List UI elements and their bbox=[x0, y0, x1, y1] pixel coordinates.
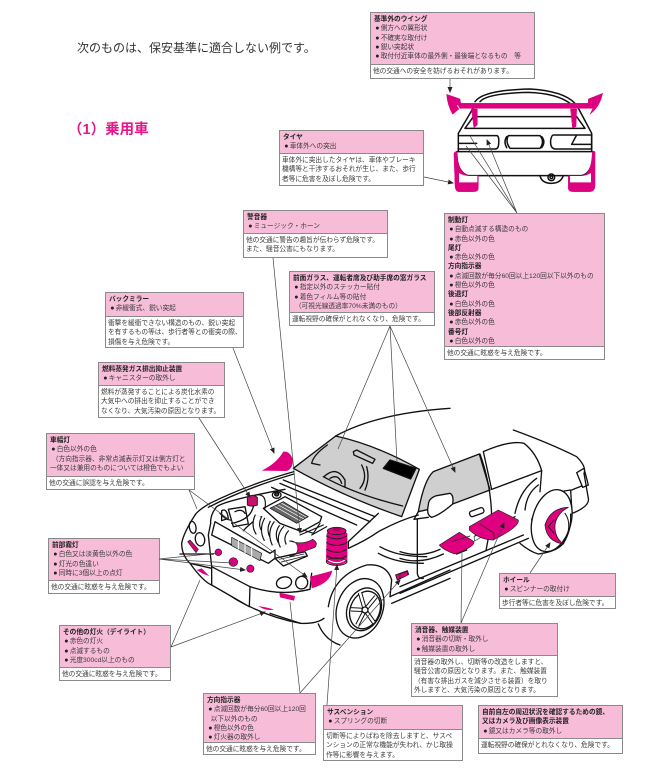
box: fog lamps: 他の交通に眩惑を与え危険です。 bbox=[51, 584, 151, 591]
box: rear lights: 方向指示器 bbox=[448, 263, 481, 270]
box: fuel evaporation: 燃料蒸発ガス排出抑止装置 bbox=[102, 366, 182, 373]
arrow: tire bbox=[424, 177, 453, 183]
box: rear lights: 赤色以外の色 bbox=[455, 319, 495, 326]
box: muffler and catalyst: 消音器の取外し、切断等の改造をしますと、 bbox=[414, 659, 547, 666]
box: wing: 不確実な取付け bbox=[381, 35, 428, 42]
box: horn: 他の交通に警告の趣旨が伝わらず危険です。 bbox=[246, 237, 379, 244]
box: rear lights: ● bbox=[449, 282, 453, 289]
box: muffler and catalyst: 触媒装置の取外し bbox=[422, 646, 475, 653]
front wheel bbox=[318, 565, 393, 645]
box: rear lights: 他の交通に眩惑を与え危険です。 bbox=[447, 350, 547, 357]
box: rear-view mirror: を有するもの等は、歩行者等との衝突の際、 bbox=[108, 329, 242, 336]
box: direct view mirrors: 鏡又はカメラ等の取外し bbox=[489, 728, 562, 735]
box: suspension: サスペンション bbox=[327, 709, 373, 716]
arrows: other lights bbox=[171, 580, 265, 647]
box: direct view mirrors: 又はカメラ及び画像表示装置 bbox=[482, 718, 569, 725]
box: windshield: 指定以外のステッカー貼付 bbox=[300, 284, 380, 291]
icon: suspension spring bbox=[326, 527, 347, 565]
box: rear lights: 赤色以外の色 bbox=[455, 254, 495, 261]
box: rear lights bbox=[444, 213, 605, 360]
box: wing: ● bbox=[375, 53, 379, 60]
box: horn: ● bbox=[248, 223, 252, 230]
rear wheel bbox=[525, 485, 579, 556]
box: muffler and catalyst: （有害な排出ガスを減少させる装置）を取り bbox=[414, 678, 548, 685]
box: rear lights: 橙色以外の色 bbox=[455, 282, 495, 289]
box: other lights: 他の交通に眩惑を与え危険です。 bbox=[62, 671, 162, 678]
box: horn: また、騒音公害にもなります。 bbox=[246, 246, 339, 253]
arrow: horn bbox=[273, 258, 300, 533]
box: other lights: 光度300cd以上のもの bbox=[70, 657, 135, 664]
box: horn: ミュージック・ホーン bbox=[254, 223, 320, 230]
box: other lights: ● bbox=[64, 657, 68, 664]
box: wheel: ホイール bbox=[503, 577, 530, 584]
box: tire: 者等に危害を及ぼし危険です。 bbox=[282, 176, 375, 183]
box: rear lights: 後部反射器 bbox=[448, 310, 481, 317]
icon: canister bbox=[247, 495, 257, 506]
arrows: fog lamps bbox=[159, 553, 245, 570]
box: other lights: 点滅するもの bbox=[70, 648, 110, 655]
box: other lights: 赤色の灯火 bbox=[70, 638, 103, 645]
box: rear lights: 点滅回数が毎分60回以上120回以下以外のもの bbox=[455, 273, 594, 280]
box: suspension: スプリングの切断 bbox=[334, 718, 387, 725]
arrow: suspension bbox=[327, 565, 337, 705]
box: muffler and catalyst: 消音器、触媒装置 bbox=[415, 627, 468, 634]
box: rear lights: 尾灯 bbox=[448, 245, 461, 252]
box: fog lamps: 同時に3個以上の点灯 bbox=[59, 570, 123, 577]
icon: mudflaps bbox=[454, 152, 595, 192]
box: other lights: ● bbox=[64, 638, 68, 645]
box: wing: 基準外のウイング bbox=[374, 16, 428, 23]
box: side lamp: 車幅灯 bbox=[50, 437, 70, 444]
box: wheel: スピンナーの取付け bbox=[510, 586, 570, 593]
box: fuel evaporation: なくなり、大気汚染の原因となります。 bbox=[101, 408, 220, 415]
box: fuel evaporation bbox=[98, 362, 225, 418]
box: horn: 警音器 bbox=[247, 214, 267, 221]
arrows: muffler bbox=[461, 523, 504, 623]
box: wing: 鋭い突起状 bbox=[381, 44, 414, 51]
box: side lamp: （方向指示器、非常点滅表示灯又は側方灯と bbox=[52, 456, 186, 463]
box: muffler and catalyst: ● bbox=[416, 636, 420, 643]
arrows: side lamp bbox=[189, 490, 307, 577]
box: suspension bbox=[323, 705, 463, 761]
heading: passenger cars: （1）乗用車 bbox=[68, 122, 149, 138]
box: windshield bbox=[289, 271, 435, 326]
box: direct view mirrors bbox=[478, 705, 623, 754]
arrows: turn signal bbox=[290, 580, 400, 693]
box: muffler and catalyst: 消音器の切断・取外し bbox=[422, 636, 489, 643]
rear view car bbox=[447, 89, 603, 192]
box: windshield: 前面ガラス、運転者席及び助手席の窓ガラス bbox=[293, 275, 426, 282]
box: fuel evaporation: 大気中への排出を抑止することができ bbox=[101, 398, 215, 405]
box: wing: ● bbox=[375, 35, 379, 42]
box: rear lights: 後退灯 bbox=[448, 291, 468, 298]
box: wing: ● bbox=[375, 44, 379, 51]
box: muffler and catalyst bbox=[411, 623, 558, 697]
box: tire: 車体外に突出したタイヤは、車体やブレーキ bbox=[282, 157, 416, 164]
icon: wing bbox=[447, 93, 603, 128]
box: other lights bbox=[59, 625, 171, 681]
box: horn bbox=[243, 210, 388, 258]
icons: pink lamps bbox=[188, 452, 409, 610]
box: suspension: ● bbox=[328, 718, 332, 725]
box: rear lights: ● bbox=[449, 254, 453, 261]
box: muffler and catalyst: 騒音公害の原因となります。また、触媒装置 bbox=[414, 668, 547, 675]
box: side lamp: 一体又は兼用のものについては橙色でもよい bbox=[50, 465, 183, 472]
box: turn signals: 以下以外のもの bbox=[211, 716, 258, 723]
box: turn signals: 方向指示器 bbox=[207, 697, 240, 704]
box: wing: 他の交通への安全を妨げるおそれがあります。 bbox=[373, 68, 513, 75]
box: fuel evaporation: キャニスターの取外し bbox=[109, 375, 176, 382]
box: direct view mirrors: ● bbox=[483, 728, 487, 735]
box: turn signals: 点滅回数が毎分60回以上120回 bbox=[214, 706, 306, 713]
box: turn signals: 灯火器の取外し bbox=[214, 734, 260, 741]
arrow: canister bbox=[199, 418, 250, 497]
box: turn signals: ● bbox=[208, 725, 212, 732]
box: muffler and catalyst: ● bbox=[416, 646, 420, 653]
box: turn signals bbox=[203, 693, 316, 755]
box: rear lights: 制動灯 bbox=[448, 217, 468, 224]
arrow: mirror bbox=[233, 348, 274, 453]
title: 次のものは、保安基準に適合しない例です。 bbox=[77, 41, 316, 55]
arrows: rear lights bbox=[466, 136, 517, 213]
box: turn signals: ● bbox=[208, 706, 212, 713]
rear and side of car bbox=[400, 430, 588, 593]
box: tire: 機構等と干渉するおそれが生じ、また、歩行 bbox=[282, 166, 416, 173]
box: rear lights: ● bbox=[449, 301, 453, 308]
box: rear-view mirror: バックミラー bbox=[109, 296, 149, 303]
box: side lamp: 白色以外の色 bbox=[57, 446, 97, 453]
box: side lamp: 他の交通に誤認を与え危険です。 bbox=[49, 480, 149, 487]
box: fog lamps: 灯光の色違い bbox=[59, 561, 99, 568]
box: fog lamps: ● bbox=[53, 561, 57, 568]
arrow: wheel bbox=[530, 543, 550, 573]
box: muffler and catalyst: 外しますと、大気汚染の原因となります。 bbox=[414, 687, 540, 694]
box: direct view mirrors: 運転視野の確保がとれなくなり、危険です。 bbox=[481, 742, 614, 749]
box: windshield: 運転視野の確保がとれなくなり、危険です。 bbox=[292, 316, 425, 323]
box: windshield: ● bbox=[294, 284, 298, 291]
box: rear lights: ● bbox=[449, 273, 453, 280]
box: rear lights: 白色以外の色 bbox=[455, 338, 495, 345]
box: turn signals: 橙色以外の色 bbox=[214, 725, 254, 732]
box: rear lights: ● bbox=[449, 319, 453, 326]
box: other lights: その他の灯火（デイライト） bbox=[63, 629, 150, 636]
arrows: windshield bbox=[338, 326, 455, 472]
box: rear lights: ● bbox=[449, 338, 453, 345]
box: fuel evaporation: ● bbox=[103, 375, 107, 382]
box: tire bbox=[279, 130, 424, 186]
box: rear-view mirror: ● bbox=[110, 305, 114, 312]
box: turn signals: ● bbox=[208, 734, 212, 741]
box: fog lamps: ● bbox=[53, 551, 57, 558]
box: wheel: 歩行者等に危害を及ぼし危険です。 bbox=[502, 600, 608, 607]
box: wheel bbox=[499, 573, 616, 609]
box: wing: ● bbox=[375, 25, 379, 32]
box: side lamp: ● bbox=[51, 446, 55, 453]
engine bbox=[212, 492, 327, 566]
box: turn signals: 他の交通に眩惑を与え危険です。 bbox=[206, 746, 306, 753]
box: rear-view mirror: 非緩衝式、鋭い突起 bbox=[116, 305, 176, 312]
box: fog lamps bbox=[48, 538, 160, 594]
box: windshield: （可視光線透過率70%未満のもの） bbox=[295, 303, 402, 310]
box: suspension: ンションの正常な機能が失われ、かじ取操 bbox=[326, 742, 453, 749]
box: rear-view mirror: 衝撃を緩衝できない構造のもの、鋭い突起 bbox=[108, 320, 235, 327]
box: rear lights: ● bbox=[449, 226, 453, 233]
box: suspension: 切断等によりばねを除去しますと、サスペ bbox=[326, 733, 452, 740]
box: fog lamps: 前部霧灯 bbox=[52, 542, 79, 549]
box: wing: 側方への翼形状 bbox=[381, 25, 428, 32]
box: tire: タイヤ bbox=[283, 134, 303, 141]
box: fog lamps: 白色又は淡黄色以外の色 bbox=[59, 551, 132, 558]
box: side lamp bbox=[46, 433, 195, 490]
box: tire: 車体外への突出 bbox=[290, 143, 336, 150]
box: wheel: ● bbox=[504, 586, 508, 593]
box: rear lights: 白色以外の色 bbox=[455, 301, 495, 308]
box: tire: ● bbox=[284, 143, 288, 150]
box: rear lights: 赤色以外の色 bbox=[455, 236, 495, 243]
icon: mufflers bbox=[439, 510, 518, 554]
box: rear lights: 番号灯 bbox=[448, 329, 468, 336]
box: windshield: 着色フィルム等の貼付 bbox=[300, 294, 366, 301]
windshield bbox=[293, 408, 450, 517]
box: wing bbox=[370, 12, 535, 79]
box: rear lights: 自動点滅する構造のもの bbox=[455, 226, 528, 233]
box: fuel evaporation: 燃料が蒸発することによる炭化水素の bbox=[101, 389, 214, 396]
arrow: wing bbox=[449, 79, 451, 92]
box: wing: 取付付近車体の最外側・最後端となるもの 等 bbox=[381, 53, 521, 60]
box: suspension: 作等に影響を与えます。 bbox=[326, 752, 399, 759]
icon: horn bbox=[289, 539, 316, 556]
box: direct view mirrors: 自前自左の周辺状況を確認するための鏡、 bbox=[482, 709, 609, 716]
side windows bbox=[418, 443, 542, 517]
box: rear lights: ● bbox=[449, 236, 453, 243]
box: fog lamps: ● bbox=[53, 570, 57, 577]
box: rear-view mirror bbox=[105, 292, 244, 348]
box: windshield: ● bbox=[294, 294, 298, 301]
front and engine bay of car bbox=[180, 408, 450, 645]
box: rear-view mirror: 損傷を与え危険です。 bbox=[108, 339, 174, 346]
box: other lights: ● bbox=[64, 648, 68, 655]
